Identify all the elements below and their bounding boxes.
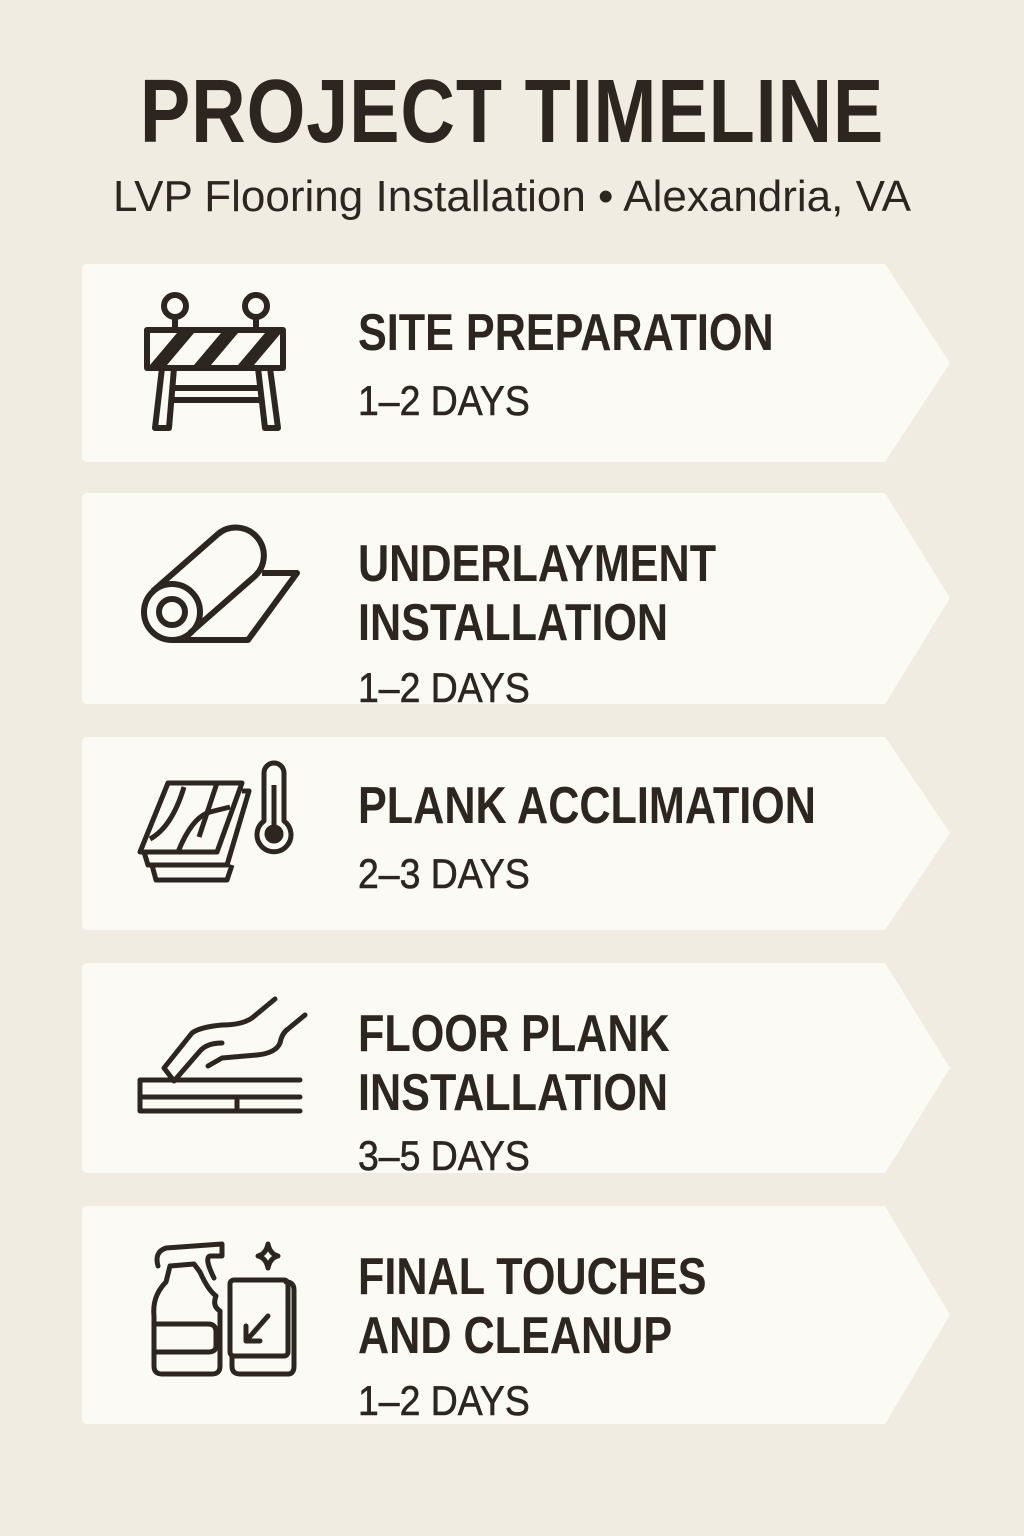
heading [358,1005,670,1122]
heading: INSTALLATION [358,594,668,652]
panel: plank acclimation [82,737,950,930]
heading: PLANK ACCLIMATION [358,777,816,835]
heading [358,1248,707,1365]
panel: site preparation [82,264,950,462]
panel: underlayment [82,493,950,711]
panel: final touches [82,1206,950,1424]
heading: FLOOR PLANK [358,1005,670,1063]
subtitle: LVP Flooring Installation • Alexandria, VA [113,172,911,221]
duration: 1–2 DAYS [358,377,530,424]
panel: floor plank installation [82,963,950,1179]
duration: 3–5 DAYS [358,1132,530,1179]
icon: roll [141,524,300,643]
heading: INSTALLATION [358,1064,668,1122]
heading: FINAL TOUCHES [358,1248,707,1306]
heading [358,535,716,652]
heading: AND CLEANUP [358,1307,672,1365]
duration: 1–2 DAYS [358,1377,530,1424]
duration: 1–2 DAYS [358,664,530,711]
icon: barricade [144,292,286,431]
heading: UNDERLAYMENT [358,535,716,593]
icon: hand laying plank [138,996,308,1114]
icon: spray bottle and cloth [151,1242,296,1376]
heading: SITE PREPARATION [358,304,774,362]
title: PROJECT TIMELINE [140,62,884,162]
icon: planks and thermometer [138,760,294,882]
duration: 2–3 DAYS [358,850,530,897]
